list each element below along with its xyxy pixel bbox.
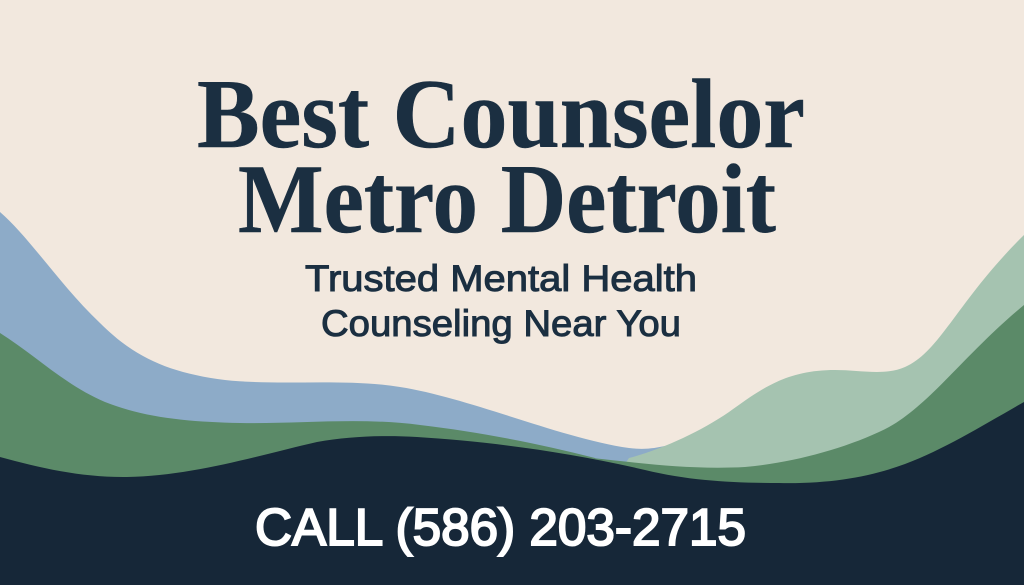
wave: green right	[592, 305, 1024, 520]
subtitle: Trusted Mental Health	[305, 258, 697, 299]
title: Best Counselor	[197, 60, 805, 169]
subtitle: Counseling Near You	[321, 303, 681, 344]
wave: navy base	[0, 402, 1024, 585]
title: Metro Detroit	[238, 145, 776, 254]
call to action phone number: CALL (586) 203-2715	[255, 499, 746, 557]
subtitle	[305, 258, 697, 344]
wave: blue left	[0, 212, 665, 490]
wave: green left	[0, 333, 640, 500]
wave: light green right	[600, 235, 1024, 500]
title	[197, 60, 805, 254]
